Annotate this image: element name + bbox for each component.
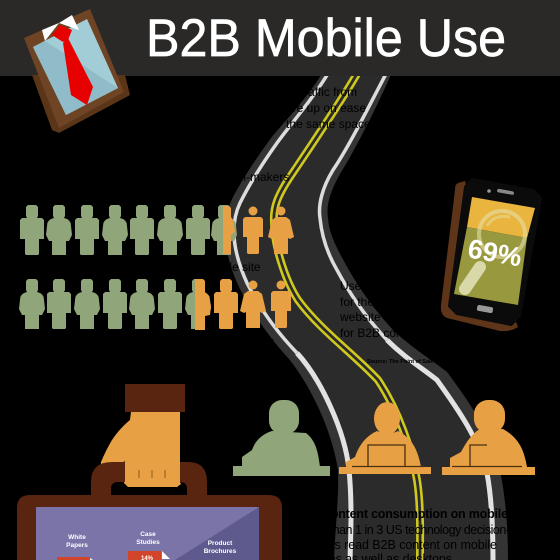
text block: content consumption on mobile: More than 1 in 3 US technology decision- bbox=[300, 523, 510, 537]
icon: smartphone 69% bbox=[441, 180, 540, 331]
icon: shirt and tie tablet bbox=[24, 9, 130, 133]
label: case studies: Case bbox=[140, 531, 156, 538]
text block: left stat: today: bbox=[200, 185, 233, 199]
label: product brochures: Product bbox=[208, 540, 233, 547]
text block: content consumption on mobile bbox=[300, 507, 510, 560]
label: product brochures: Brochures bbox=[204, 548, 237, 555]
text block: left stat: to mobile site bbox=[190, 260, 261, 274]
text block: left stat: Decision-makers bbox=[200, 170, 289, 184]
text block: right stat: for B2B content bbox=[340, 326, 423, 340]
road bbox=[225, 72, 508, 560]
icon: green desk person bbox=[233, 400, 330, 476]
people chart: row 1 bbox=[20, 205, 294, 255]
text block: traffic intro bbox=[262, 85, 371, 131]
text block: left stat bbox=[190, 170, 289, 348]
label: white papers: White bbox=[68, 534, 86, 541]
text block: traffic intro: are up on ease bbox=[286, 101, 366, 115]
label: white papers: Papers bbox=[66, 542, 88, 549]
icon: hand bbox=[101, 384, 185, 487]
text block: right stat: website bbox=[339, 310, 381, 324]
text block: content consumption on mobile: Content consumption on mobile bbox=[322, 507, 508, 521]
text block: right stat: Users bbox=[340, 279, 371, 293]
source note: Source: The Point of Sale bbox=[367, 359, 434, 365]
text block: left stat: on their devices bbox=[190, 334, 274, 348]
text block: traffic intro: the same space bbox=[286, 117, 371, 131]
label: case studies: Studies bbox=[136, 539, 160, 546]
people chart: row 2 bbox=[19, 279, 291, 330]
text block: right stat: for the bbox=[340, 295, 374, 309]
document: white papers bbox=[57, 557, 93, 560]
icon: orange desk person at right bbox=[442, 400, 535, 475]
icon: smartphone 69%: 69% bbox=[466, 234, 524, 272]
title: B2B Mobile Use bbox=[146, 9, 506, 68]
icon: orange desk person with laptop bbox=[339, 402, 431, 474]
text block: content consumption on mobile: makers read B2B content on mobile bbox=[300, 538, 497, 552]
text block: right stat bbox=[339, 279, 423, 340]
document: case studies bbox=[128, 551, 170, 560]
header bar bbox=[0, 0, 560, 76]
text block: traffic intro: Mobile traffic from bbox=[262, 85, 357, 99]
briefcase bbox=[17, 462, 282, 560]
